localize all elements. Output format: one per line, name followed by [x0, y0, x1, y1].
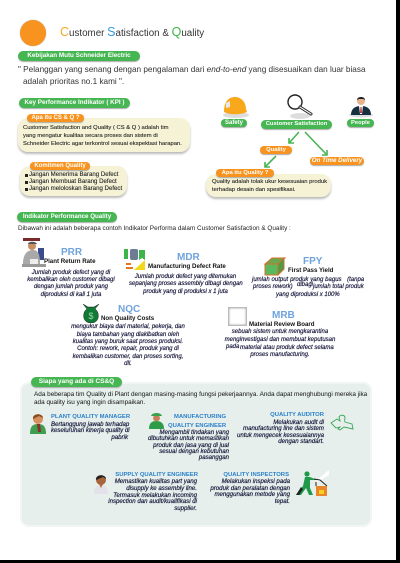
block: MRB: Material Review Board	[249, 321, 315, 328]
block: manufacturing quality engineer: dibutuhkan untuk memastikan	[148, 435, 229, 442]
block: plant quality manager: Bertanggung jawab terhadap	[51, 421, 129, 428]
label: Apa itu CS & Q	[27, 114, 84, 122]
block: FPY: yang diproduksi x 100%	[276, 292, 340, 298]
heading: Siapa yang ada di CS&Q	[31, 377, 122, 387]
block: manufacturing quality engineer: MANUFACTURING	[174, 414, 226, 420]
text: panel intro: ada quality isu yang ingin disampaikan.	[34, 399, 145, 406]
block: NQC: kualitas yang buruk saat proses produksi.	[73, 339, 183, 345]
policy statement: adalah prioritas no.1 kami ".	[23, 77, 124, 86]
block: manufacturing quality engineer: produk dan jasa yang di jual	[153, 442, 229, 449]
block: PRR: Plant Return Rate	[44, 258, 96, 265]
text: Quality description: Quality adalah tolak ukur kesesuaian produk	[212, 179, 327, 185]
text: Quality description	[212, 179, 328, 193]
block: MRB	[224, 310, 336, 358]
block: quality auditor: manufacturing line dan sistem	[243, 425, 324, 432]
icon: manufacturing quality engineer	[149, 413, 164, 429]
list: Komitmen: Jangan meloloskan Barang Defect	[29, 185, 122, 192]
icon: supply quality engineer	[94, 475, 108, 494]
heading: KPI	[19, 98, 130, 108]
label: Safety: Safety	[225, 120, 243, 126]
block: MRB: menginvestigasi dan membuat keputusan	[225, 337, 335, 343]
block: NQC: mengukur biaya dari material, pekerja, dan	[71, 324, 185, 330]
text: Quality description: terhadap desain dan spesifikasi.	[212, 187, 296, 193]
block: NQC: biaya tambahan yang diakibatkan oleh	[77, 332, 179, 338]
label: Safety	[221, 119, 247, 127]
icon: NQC money bag	[82, 304, 100, 323]
block: manufacturing quality engineer: pasanggan	[199, 454, 229, 461]
icon: quality auditor outline	[330, 414, 354, 430]
panel: Apa itu Quality	[206, 174, 331, 197]
block: manufacturing quality engineer: QUALITY ENGINEER	[168, 423, 226, 429]
block: FPY: First Pass Yield	[288, 267, 333, 274]
title: Customer Satisfaction & Quality	[60, 25, 204, 39]
block: NQC	[71, 304, 185, 367]
block: NQC: NQC	[118, 304, 140, 315]
policy statement	[18, 65, 366, 86]
block: MDR: produk yang di produksi x 1 juta	[143, 289, 228, 295]
label: On Time Delivery: On Time Delivery	[312, 157, 362, 164]
block: plant quality manager: keseluruhan kinerja quality di	[51, 427, 130, 434]
block: supply quality engineer: inspection dan audit/kualifikasi di	[108, 498, 197, 505]
label: People	[347, 119, 374, 127]
block: MDR: Manufacturing Defect Rate	[148, 263, 226, 270]
block: plant quality manager: PLANT QUALITY MANAGER	[51, 414, 130, 420]
label: Quality	[260, 146, 292, 154]
block: plant quality manager	[51, 414, 130, 441]
block: supply quality engineer: disupply ke assembly line.	[126, 485, 197, 492]
label: Apa itu CS & Q: Apa itu CS & Q ?	[32, 115, 80, 121]
block: supply quality engineer: Memastikan kualitas part yang	[115, 478, 197, 485]
block: MDR: sepanjang proses assembly dibagi dengan	[129, 281, 243, 287]
icon: FPY green box	[264, 257, 286, 276]
block: MRB: material atau produk defect selama	[240, 345, 334, 351]
block: PRR	[27, 247, 115, 298]
panel: Komitmen Quality	[20, 166, 127, 196]
block: MRB: MRB	[272, 310, 295, 321]
label: Customer Satisfaction: Customer Satisfaction	[266, 121, 327, 127]
block: quality inspectors: menggunakan metode yang	[214, 491, 290, 498]
block: NQC: Contoh: rework, repair, produk yang di	[77, 346, 179, 352]
block: NQC: kembalikan customer, dan proses sorting,	[73, 354, 183, 360]
label: Apa itu Quality: Apa itu Quality ?	[222, 170, 268, 176]
block: quality inspectors: tepat.	[275, 498, 290, 505]
block: FPY: dibagi	[297, 282, 313, 288]
block: quality auditor: Melakukan audit di	[273, 419, 324, 426]
icon: orange circle logo	[20, 20, 46, 46]
block: FPY: FPY	[303, 256, 322, 267]
block: manufacturing quality engineer: Mengambil tindakan yang	[160, 429, 229, 436]
block: MDR	[128, 252, 243, 295]
icon: PRR worker	[22, 238, 46, 267]
intro text: indikator: Dibawah ini adalah beberapa contoh Indikator Performa dalam Customer Satisfaction & Quality :	[18, 225, 291, 232]
label: Komitmen Quality	[30, 162, 90, 170]
block: FPY: jumlah total produk	[313, 284, 364, 290]
block: quality inspectors: Melakukan inspeksi pada	[222, 478, 290, 485]
panel: Siapa yang ada di CS&Q	[20, 382, 372, 527]
block: NQC: Non Quality Costs	[101, 315, 154, 322]
block: quality auditor	[237, 412, 324, 445]
arrows: flow from Customer Satisfaction	[264, 132, 328, 168]
block: PRR: dengan jumlah produk yang	[34, 284, 108, 290]
block: quality inspectors: QUALITY INSPECTORS	[223, 472, 289, 478]
text: CS & Q description: Schneider Electric agar terkontrol sesuai ekspektasi harapan.	[23, 141, 182, 147]
block: MDR: Jumlah produk defect yang ditemukan	[135, 274, 236, 280]
block: manufacturing quality engineer	[148, 414, 230, 461]
block: PRR: PRR	[61, 247, 82, 258]
block: supply quality engineer: SUPPLY QUALITY ENGINEER	[115, 472, 198, 478]
block: MDR: MDR	[177, 252, 200, 263]
block: FPY: jumlah output produk yang bagus (tanpa	[252, 277, 364, 283]
list: Komitmen: Jangan Membuat Barang Defect	[29, 178, 117, 185]
block: quality auditor: dengan standart.	[278, 438, 324, 445]
text: CS & Q description	[23, 125, 182, 147]
text: CS & Q description: yang mengatur kualitas secara proses dan sistem di	[23, 133, 158, 139]
heading: KPI: Key Performance Indikator ( KPI )	[24, 99, 125, 106]
list: Komitmen: Jangan Menerima Barang Defect	[29, 171, 118, 178]
label: Komitmen Quality: Komitmen Quality	[34, 163, 86, 169]
block: MRB: proses manufacturing.	[250, 352, 310, 358]
heading: Indikator Performance Quality	[17, 212, 117, 222]
heading: Kebijakan Mutu	[18, 51, 140, 61]
block: MRB: sebuah sistem untuk mengkarantina	[232, 329, 328, 335]
block: quality auditor: untuk mengecek kesesuaiannya	[237, 432, 324, 439]
block: quality inspectors	[210, 472, 290, 505]
text: panel intro	[34, 391, 368, 406]
block: quality auditor: QUALITY AUDITOR	[270, 412, 324, 418]
block: manufacturing quality engineer: sesuai dengan kebutuhan	[159, 448, 229, 455]
block: FPY: proses rework)	[253, 284, 293, 290]
policy statement: " Pelanggan yang senang dengan pengalaman dari end-to-end yang disesuaikan dan luar biasa	[18, 65, 366, 74]
heading: Kebijakan Mutu: Kebijakan Mutu Schneider Electric	[27, 52, 131, 59]
block: FPY	[251, 256, 364, 298]
label: Apa itu Quality	[216, 169, 274, 177]
block: PRR: diproduksi di kali 1 juta	[41, 292, 101, 298]
block: MRB: pada	[226, 344, 239, 350]
block: supply quality engineer: supplier.	[174, 505, 197, 512]
block: PRR: kembalikan oleh customer dibagi	[27, 277, 115, 283]
text: panel intro: Ada beberapa tim Quality di Plant dengan masing-masing fungsi pekerjaannya. Anda dapat menghubungi mereka jika	[34, 391, 367, 398]
icon: NQC money bag: $	[88, 311, 94, 321]
block: quality inspectors: produk dan peralatan dengan	[210, 485, 290, 492]
icon: plant quality manager	[30, 414, 46, 434]
icon: safety helmet	[223, 97, 249, 118]
text: CS & Q description: Customer Satisfaction and Quality ( CS & Q ) adalah tim	[23, 125, 169, 131]
icon: MRB empty box	[228, 307, 247, 326]
icon: magnifying glass	[287, 94, 313, 119]
heading: Indikator Performance Quality: Indikator Performance Quality	[23, 213, 111, 220]
block: PRR: Jumlah produk defect yang di	[32, 270, 110, 276]
block: supply quality engineer	[108, 472, 198, 512]
icon: businessman	[349, 97, 373, 118]
icon: MDR machine	[124, 249, 145, 270]
list: Komitmen	[25, 171, 122, 192]
panel: Apa itu CS & Q	[18, 118, 190, 152]
label: Customer Satisfaction	[261, 120, 332, 129]
label: People: People	[351, 120, 370, 126]
heading: Siapa yang ada di CS&Q: Siapa yang ada di CS&Q	[39, 378, 114, 385]
block: plant quality manager: pabrik	[111, 434, 128, 441]
icon: inspector with box	[296, 470, 329, 496]
label: Quality: Quality	[266, 147, 286, 153]
block: supply quality engineer: Termasuk melakukan incoming	[113, 492, 197, 499]
block: NQC: dll.	[124, 361, 132, 367]
